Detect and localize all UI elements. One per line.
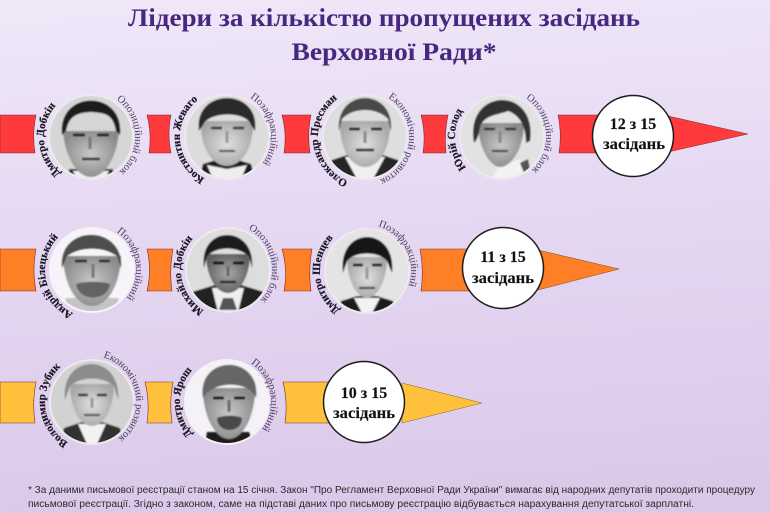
portrait: Михайло Добкін xyxy=(174,224,279,316)
counter: 11 of 15 xyxy=(462,228,544,308)
portrait: Костянтин Жеваго: Костянтин Жеваго xyxy=(173,97,204,185)
portrait: Дмитро Шенцев xyxy=(312,220,418,315)
counter: 10 of 15: засідань xyxy=(333,405,396,422)
row 3: 10 of 15 sessions xyxy=(0,350,482,448)
portrait: Юрій Солод xyxy=(448,94,554,180)
yellow arrow head xyxy=(402,383,482,423)
portrait: Володимир Зубик xyxy=(39,350,144,448)
red ribbon segments xyxy=(0,115,600,153)
row 1: 12 of 15 sessions xyxy=(0,92,748,186)
counter: 12 of 15: 12 з 15 xyxy=(610,116,656,133)
portrait: Юрій Солод: Юрій Солод xyxy=(448,108,466,172)
counter: 11 of 15: 11 з 15 xyxy=(480,249,526,266)
portrait: Михайло Добкін: Михайло Добкін xyxy=(174,236,204,316)
portrait: Михайло Добкін: Опозиційний блок xyxy=(250,224,279,303)
counter: 10 of 15: 10 з 15 xyxy=(341,385,387,402)
portrait: Андрій Білецький xyxy=(38,226,142,318)
portrait: Дмитро Ярош xyxy=(174,358,278,445)
portrait: Костянтин Жеваго xyxy=(173,92,278,185)
footnote xyxy=(28,485,755,510)
portrait: Дмитро Шенцев: Позафракційний xyxy=(378,220,418,287)
portrait: Дмитро Добкін: Опозиційний блок xyxy=(118,96,142,175)
portrait: Юрій Солод: Опозиційний блок xyxy=(527,94,554,174)
footnote: * За даними письмової реєстрації станом на 15 січня. Закон "Про Регламент Верховної Ради України" вимагає від народних депутатів проходити процедуру xyxy=(28,485,755,496)
title xyxy=(128,5,640,66)
red arrow head xyxy=(668,116,748,152)
portrait: Андрій Білецький: Андрій Білецький xyxy=(38,232,74,318)
counter: 12 of 15: засідань xyxy=(603,136,666,153)
portrait: Андрій Білецький: Позафракційний xyxy=(116,226,142,302)
row 2: 11 of 15 sessions xyxy=(0,220,619,318)
title: Лідери за кількістю пропущених засідань xyxy=(128,5,640,32)
portrait: Володимир Зубик: Володимир Зубик xyxy=(39,364,68,448)
portrait: Дмитро Шенцев: Дмитро Шенцев xyxy=(312,236,342,315)
portrait: Олександр Пресман: Олександр Пресман xyxy=(310,95,346,186)
portrait: Дмитро Добкін: Дмитро Добкін xyxy=(36,102,62,178)
portrait: Олександр Пресман xyxy=(310,92,416,186)
title: Верховної Ради* xyxy=(292,39,496,66)
portrait: Володимир Зубик: Економічний розвиток xyxy=(104,350,144,442)
portrait: Дмитро Добкін xyxy=(36,94,142,180)
yellow ribbon segments xyxy=(0,382,330,423)
counter: 10 of 15 xyxy=(324,362,404,442)
footnote: письмової реєстрації. Згідно з законом, саме на підставі даних про письмову реєстрацію відбувається нарахування депутатської зарплатні. xyxy=(28,498,694,510)
portrait: Дмитро Ярош: Дмитро Ярош xyxy=(174,367,194,438)
orange arrow head xyxy=(538,250,619,290)
counter: 11 of 15: засідань xyxy=(472,270,535,287)
portrait: Костянтин Жеваго: Позафракційний xyxy=(250,92,278,166)
counter: 12 of 15 xyxy=(592,96,674,176)
portrait: Дмитро Ярош: Позафракційний xyxy=(251,358,278,432)
orange ribbon segments xyxy=(0,249,470,291)
portrait: Олександр Пресман: Економічний розвиток xyxy=(380,92,416,184)
